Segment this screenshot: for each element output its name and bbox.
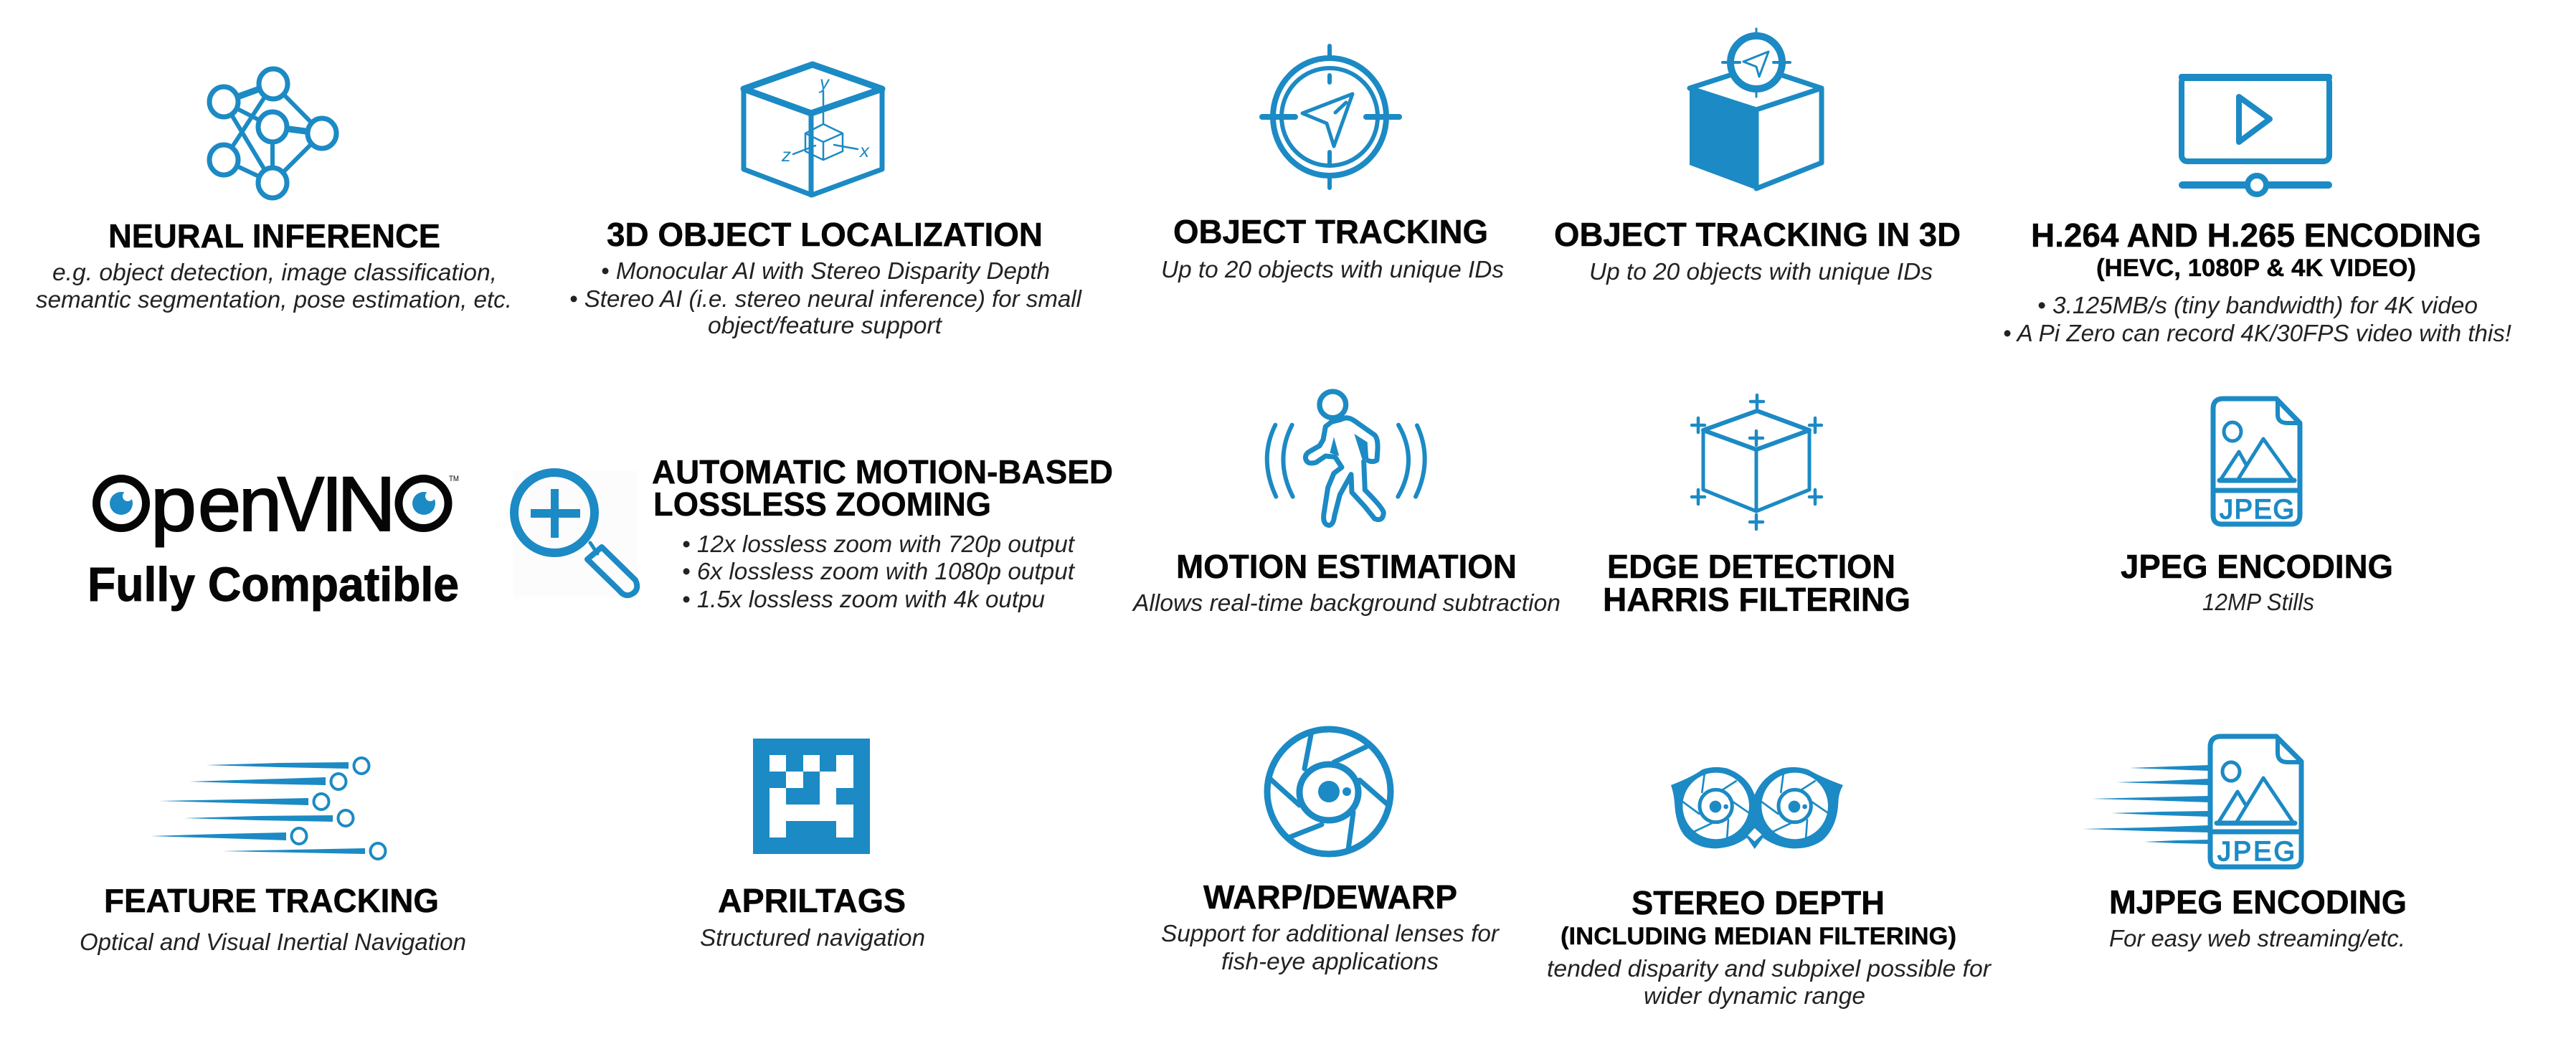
description: automatic zooming <box>682 531 1076 612</box>
heading: MJPEG encoding: MJPEG ENCODING <box>2109 883 2407 921</box>
description: object tracking in 3D: Up to 20 objects with unique IDs <box>1589 258 1933 285</box>
panel: warp/dewarp <box>1161 729 1500 974</box>
icon: moving JPEG file: JPEG <box>2217 837 2295 867</box>
icon: magnifier <box>513 471 638 597</box>
panel: OpenVINO logo <box>87 460 459 612</box>
icon: moving JPEG file <box>2083 736 2301 867</box>
icon: neural network <box>209 69 336 198</box>
heading: stereo depth: STEREO DEPTH <box>1632 884 1885 921</box>
heading: H.264 and H.265 encoding: (HEVC, 1080P & 4K VIDEO) <box>2096 255 2416 282</box>
heading: edge detection: HARRIS FILTERING <box>1603 581 1910 618</box>
logo: OpenVINO <box>96 460 459 547</box>
description: neural inference <box>36 259 512 313</box>
heading: stereo depth: (INCLUDING MEDIAN FILTERING) <box>1561 923 1956 950</box>
panel: H.264 and H.265 encoding <box>2003 74 2511 346</box>
icon: compass target <box>1262 46 1399 188</box>
description: automatic zooming: • 12x lossless zoom with 720p output <box>682 531 1076 557</box>
description: H.264 and H.265 encoding <box>2003 292 2511 346</box>
icon: apriltag marker <box>753 739 870 854</box>
icon: walking person <box>1267 392 1425 526</box>
icon: cube with compass <box>1690 29 1822 190</box>
description: warp/dewarp: Support for additional lenses for <box>1161 920 1500 946</box>
icon: stereo owl eyes <box>1671 767 1843 849</box>
description: apriltags: Structured navigation <box>700 924 925 951</box>
description: MJPEG encoding: For easy web streaming/etc. <box>2109 925 2405 952</box>
logo: OpenVINO: V <box>278 460 324 547</box>
description: feature tracking: Optical and Visual Inertial Navigation <box>80 929 466 955</box>
panel: MJPEG encoding <box>2083 736 2407 952</box>
description: stereo depth: wider dynamic range <box>1644 982 1865 1009</box>
icon: video player <box>2179 74 2332 194</box>
panel: motion estimation <box>1132 392 1561 616</box>
description: H.264 and H.265 encoding: • A Pi Zero can record 4K/30FPS video with this! <box>2003 320 2511 346</box>
heading: feature tracking: FEATURE TRACKING <box>104 882 439 919</box>
icon: moving feature points <box>151 758 386 859</box>
panel: apriltags <box>700 739 925 951</box>
description: neural inference: semantic segmentation, pose estimation, etc. <box>36 286 512 313</box>
heading: object tracking in 3D: OBJECT TRACKING IN 3D <box>1554 216 1961 253</box>
heading: stereo depth <box>1561 884 1956 950</box>
description: automatic zooming: • 1.5x lossless zoom with 4k outpu <box>682 586 1045 612</box>
panel: object tracking in 3D <box>1554 29 1961 285</box>
logo: OpenVINO: n <box>239 460 282 547</box>
description: warp/dewarp: fish-eye applications <box>1221 948 1439 974</box>
icon: 3D cube with axes: x <box>858 140 870 161</box>
logo: OpenVINO: I <box>321 460 343 547</box>
icon: JPEG file <box>2213 399 2300 525</box>
heading: warp/dewarp: WARP/DEWARP <box>1203 878 1457 916</box>
logo: OpenVINO: e <box>198 460 241 547</box>
heading: edge detection <box>1603 548 1910 618</box>
panel: feature tracking <box>80 758 466 955</box>
description: warp/dewarp <box>1161 920 1500 974</box>
heading: object tracking: OBJECT TRACKING <box>1173 213 1488 250</box>
heading: automatic zooming <box>652 453 1113 523</box>
panel: stereo depth <box>1547 767 1992 1009</box>
description: 3D object localization: • Monocular AI with Stereo Disparity Depth <box>601 257 1050 284</box>
description: 3D object localization: • Stereo AI (i.e. stereo neural inference) for small <box>569 285 1083 312</box>
heading: apriltags: APRILTAGS <box>718 882 906 919</box>
panel: object tracking <box>1161 46 1504 283</box>
panel: edge detection <box>1603 395 1910 618</box>
description: stereo depth: tended disparity and subpixel possible for <box>1547 955 1992 982</box>
icon: cube with corner marks <box>1692 395 1822 529</box>
logo: OpenVINO: N <box>337 460 396 547</box>
panel: automatic zooming <box>513 453 1113 612</box>
panel: 3D object localization <box>569 65 1083 338</box>
description: stereo depth <box>1547 955 1992 1009</box>
description: neural inference: e.g. object detection, image classification, <box>52 259 497 285</box>
heading: automatic zooming: LOSSLESS ZOOMING <box>653 485 991 523</box>
panel: neural inference <box>36 69 512 313</box>
heading: edge detection: EDGE DETECTION <box>1607 548 1895 585</box>
heading: neural inference: NEURAL INFERENCE <box>108 217 440 255</box>
logo: OpenVINO: p <box>151 460 196 547</box>
heading: H.264 and H.265 encoding: H.264 AND H.265 ENCODING <box>2031 217 2481 254</box>
description: object tracking: Up to 20 objects with unique IDs <box>1161 256 1504 283</box>
icon: fisheye aperture <box>1267 729 1391 854</box>
icon: 3D cube with axes <box>744 65 882 195</box>
icon: 3D cube with axes: y <box>818 72 830 93</box>
heading: automatic zooming: AUTOMATIC MOTION-BASED <box>652 453 1113 490</box>
caption: fully compatible: Fully Compatible <box>87 558 459 612</box>
description: JPEG encoding: 12MP Stills <box>2202 589 2314 615</box>
heading: JPEG encoding: JPEG ENCODING <box>2121 548 2393 585</box>
icon: 3D cube with axes: z <box>781 144 791 166</box>
logo: OpenVINO: TM <box>449 475 459 483</box>
description: H.264 and H.265 encoding: • 3.125MB/s (tiny bandwidth) for 4K video <box>2037 292 2478 318</box>
heading: motion estimation: MOTION ESTIMATION <box>1176 548 1517 585</box>
heading: 3D object localization: 3D OBJECT LOCALIZATION <box>607 216 1043 253</box>
description: motion estimation: Allows real-time background subtraction <box>1132 589 1561 616</box>
icon: JPEG file: JPEG <box>2220 495 2294 525</box>
panel: JPEG encoding <box>2121 399 2393 615</box>
description: automatic zooming: • 6x lossless zoom with 1080p output <box>682 558 1076 584</box>
description: 3D object localization <box>569 257 1083 338</box>
description: 3D object localization: object/feature support <box>708 312 943 338</box>
heading: H.264 and H.265 encoding <box>2031 217 2481 282</box>
